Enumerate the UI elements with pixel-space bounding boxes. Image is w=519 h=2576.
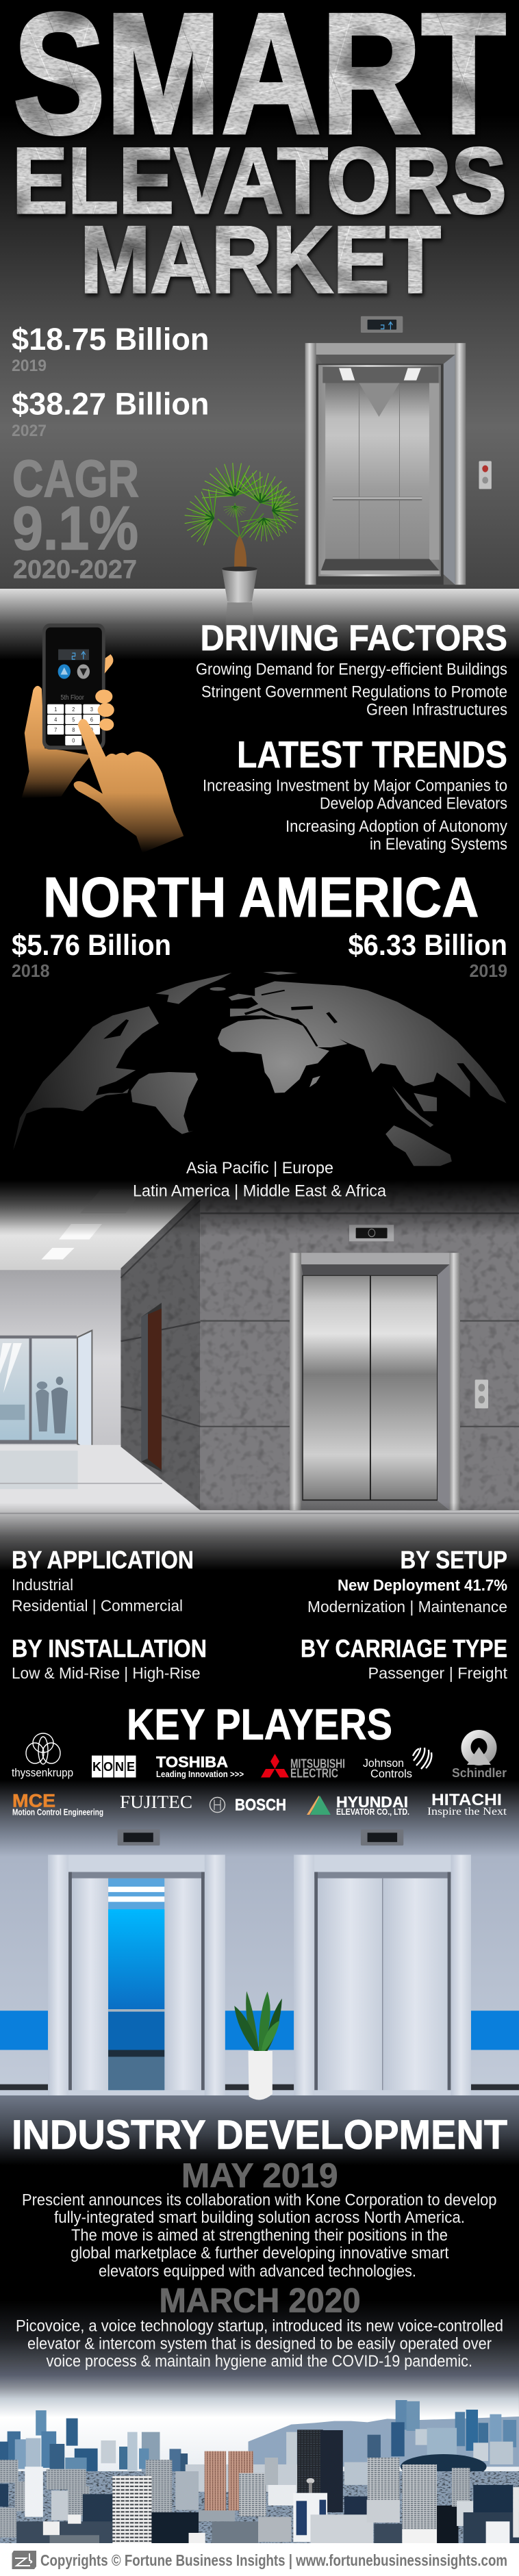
CAGR block: 2020-2027	[13, 556, 137, 585]
logo: KONE: K	[92, 1760, 101, 1774]
CAGR block: CAGR	[12, 450, 139, 508]
segment: by installation: Low & Mid-Rise | High-Rise	[12, 1664, 200, 1682]
panel: bottom elevators wall	[0, 1780, 519, 2102]
logo: Fujitec: FUJITEC	[120, 1792, 192, 1812]
text: march 2020 body: voice process & maintain hygiene amid the COVID-19 pandemic.	[47, 2352, 472, 2371]
keypad: 5	[72, 716, 75, 723]
market size stats	[12, 322, 209, 440]
text: may 2019 body: elevators equipped with advanced technologies.	[99, 2262, 416, 2281]
left elevator	[48, 1854, 225, 2096]
keypad: 4	[54, 716, 58, 723]
market size stats: 2019	[12, 357, 47, 375]
text: latest trends list: Increasing Adoption of Autonomy	[286, 817, 507, 836]
map: dark globe	[13, 971, 507, 1166]
text: other regions: Latin America | Middle East & Africa	[133, 1182, 387, 1201]
logo: Johnson Controls	[363, 1748, 431, 1780]
icon: potted plant	[234, 1991, 282, 2100]
icon: Fortune Business Insights logo	[12, 2551, 36, 2569]
icon: hands holding phone	[21, 624, 183, 853]
stat: north america 2018: $5.76 Billion	[12, 929, 171, 962]
title	[12, 0, 507, 313]
logo: Johnson Controls: Johnson	[363, 1757, 404, 1770]
far towers left	[0, 2410, 188, 2476]
segment: by setup: New Deployment 41.7%	[338, 1576, 507, 1594]
text: may 2019 body	[22, 2191, 497, 2281]
logo: Motion Control Engineering: MCE	[12, 1791, 55, 1811]
keypad: 8	[72, 727, 75, 733]
heading: key players: KEY PLAYERS	[127, 1700, 392, 1749]
stat: north america 2018	[12, 929, 171, 981]
panel: hero wall	[0, 0, 519, 589]
text: may 2019 body: global marketplace & further developing innovative smart	[71, 2244, 449, 2262]
segment: by installation: BY INSTALLATION	[12, 1635, 207, 1662]
market size stats: $38.27 Billion	[12, 386, 209, 422]
text: latest trends list: in Elevating Systems	[370, 835, 507, 854]
panel: elevator lobby	[0, 1178, 519, 1574]
market size stats: 2027	[12, 422, 47, 440]
CAGR block	[12, 450, 139, 585]
segment: by setup: Modernization | Maintenance	[307, 1598, 507, 1616]
keypad: 2	[72, 706, 75, 713]
subheading: may 2019: MAY 2019	[181, 2156, 338, 2195]
logo: KONE: E	[127, 1760, 135, 1774]
subheading: march 2020: MARCH 2020	[159, 2281, 360, 2319]
icon: indicators	[118, 1829, 403, 1846]
stat: north america 2018: 2018	[12, 960, 49, 981]
CAGR block: 9.1%	[12, 494, 138, 563]
segment: by application: BY APPLICATION	[12, 1546, 194, 1574]
keypad: 6	[90, 716, 93, 723]
segment: by application	[12, 1546, 194, 1614]
icon: palm plant	[181, 456, 303, 633]
icon: lobby call buttons	[475, 1379, 488, 1408]
keypad	[47, 704, 100, 745]
logo: Mitsubishi Electric: ELECTRIC	[290, 1766, 338, 1780]
near buildings	[0, 2430, 519, 2543]
icon: floor indicator	[361, 316, 403, 333]
logo: Toshiba: Leading Innovation >>>	[156, 1769, 244, 1779]
stat: north america 2019: 2019	[470, 960, 507, 981]
panel: hero floor	[0, 589, 519, 660]
far towers right	[286, 2400, 516, 2471]
logo: Hyundai Elevator: HYUNDAI	[336, 1794, 408, 1811]
logo: Motion Control Engineering: Motion Control Engineering	[12, 1807, 103, 1817]
keypad: 7	[54, 727, 57, 733]
footer bar	[0, 2543, 519, 2576]
logo: Hyundai Elevator: ELEVATOR CO., LTD.	[336, 1807, 409, 1817]
keypad: 3	[90, 706, 93, 713]
logo: Schindler	[452, 1730, 507, 1780]
logo: Bosch: BOSCH	[235, 1796, 286, 1814]
panel: bottom floor	[0, 2095, 519, 2165]
segment: by setup	[307, 1546, 507, 1616]
icon: lobby floor indicator	[349, 1225, 394, 1241]
panel: city skyline	[0, 2375, 519, 2543]
logo: Hitachi: Inspire the Next	[427, 1806, 507, 1818]
elevator: open cabin	[305, 316, 492, 585]
logo: Mitsubishi Electric	[261, 1754, 345, 1780]
logo: Schindler: Schindler	[452, 1766, 507, 1780]
keypad: 9	[90, 727, 93, 733]
logo: Mitsubishi Electric: MITSUBISHI	[290, 1757, 345, 1770]
logo: Hitachi	[427, 1791, 507, 1818]
lobby top fade	[0, 1174, 519, 1236]
heading: north america: NORTH AMERICA	[43, 865, 479, 929]
segment: by carriage type: Passenger | Freight	[368, 1664, 508, 1682]
logo: thyssenkrupp	[12, 1733, 73, 1779]
text: driving factors list: Green Infrastructures	[366, 701, 507, 719]
text: may 2019 body: fully-integrated smart building solution across North America.	[54, 2208, 465, 2227]
heading: driving factors	[196, 618, 507, 719]
side doorway	[141, 1303, 162, 1472]
text: may 2019 body: The move is aimed at strengthening their positions in the	[71, 2226, 448, 2245]
segment: by carriage type	[301, 1635, 508, 1682]
stat: north america 2019: $6.33 Billion	[348, 929, 507, 962]
city base	[0, 2471, 519, 2543]
logo: KONE	[92, 1755, 136, 1777]
market size stats: $18.75 Billion	[12, 322, 209, 357]
logo: KONE: O	[103, 1760, 113, 1774]
logo: Toshiba: TOSHIBA	[156, 1754, 228, 1770]
logo: Motion Control Engineering	[12, 1791, 103, 1817]
logo: KONE: N	[115, 1760, 124, 1774]
logo: Toshiba	[156, 1754, 244, 1779]
text: march 2020 body	[16, 2317, 503, 2371]
panel: sky fade	[0, 2300, 519, 2376]
segment: by installation	[12, 1635, 207, 1682]
elevator frame and doors	[290, 1253, 460, 1510]
heading: latest trends	[203, 733, 507, 854]
logo: Hitachi: HITACHI	[431, 1791, 502, 1809]
logo: Bosch	[210, 1796, 286, 1814]
title: MARKET	[80, 207, 441, 313]
panel: twin elevators	[0, 1829, 519, 2096]
logo: thyssenkrupp: thyssenkrupp	[12, 1766, 73, 1779]
stat: north america 2019	[348, 929, 507, 981]
window with silhouettes	[0, 1331, 92, 1455]
right elevator	[294, 1854, 471, 2096]
logo: Hyundai Elevator	[307, 1794, 409, 1817]
segment: by application: Industrial	[12, 1576, 73, 1594]
keypad: 1	[54, 706, 57, 713]
text: latest trends list	[203, 776, 507, 854]
segment: by application: Residential | Commercial	[12, 1596, 183, 1614]
text: driving factors list	[196, 660, 507, 719]
keypad: 0	[72, 737, 75, 743]
lobby bottom fade	[0, 1503, 519, 1578]
icon: hands holding phone: 5th Floor	[60, 693, 84, 701]
text: other regions	[133, 1159, 387, 1201]
logo: Johnson Controls: Controls	[370, 1768, 412, 1780]
icon: call button panel	[479, 461, 492, 489]
text: other regions: Asia Pacific | Europe	[186, 1159, 333, 1177]
